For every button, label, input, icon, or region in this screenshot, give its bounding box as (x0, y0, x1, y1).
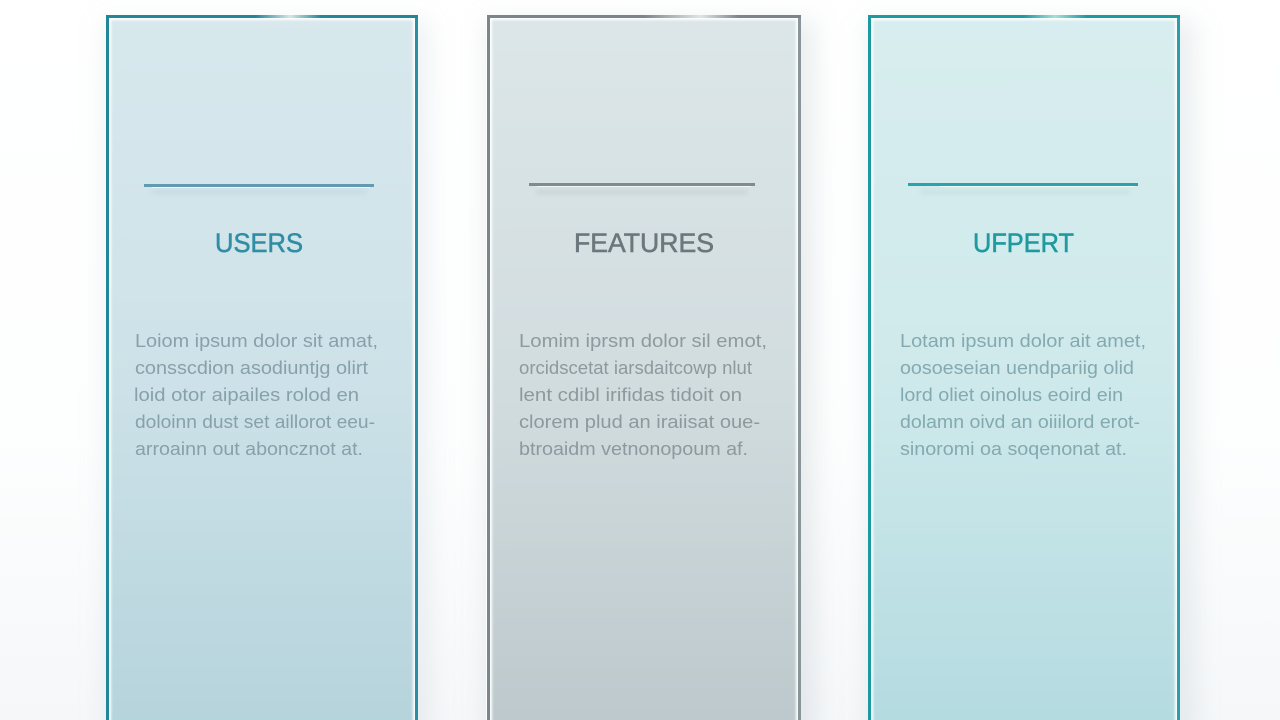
text block: users: arroainn out aboncznot at. (135, 438, 363, 459)
panel: users (104, 15, 430, 720)
heading: features: FEATURES (574, 228, 714, 258)
text block: users: Loiom ipsum dolor sit amat, (135, 330, 378, 351)
text block: users (134, 330, 378, 459)
divider rule: uffert (908, 183, 1138, 194)
text block: features: btroaidm vetnonopoum af. (519, 438, 748, 459)
text block: features: clorem plud an iraiisat oue- (519, 411, 760, 432)
text block: users: consscdion asodiuntjg olirt (135, 357, 368, 378)
text block: features: orcidscetat iarsdaitcowp nlut (519, 357, 752, 378)
text block: uffert: sinoromi oa soqenonat at. (900, 438, 1127, 459)
text block: features: Lomim iprsm dolor sil emot, (519, 330, 767, 351)
heading: users: USERS (215, 228, 303, 258)
divider rule: users (144, 184, 374, 194)
text block: features (519, 330, 767, 459)
text block: uffert: oosoeseian uendpariig olid (900, 357, 1134, 378)
text block: uffert: Lotam ipsum dolor ait amet, (900, 330, 1146, 351)
text block: uffert (900, 330, 1146, 459)
text block: uffert: lord oliet oinolus eoird ein (900, 384, 1123, 405)
text block: users: loid otor aipailes rolod en (134, 384, 359, 405)
panel: features (486, 15, 816, 720)
heading: uffert: UFPERT (973, 228, 1074, 258)
text block: users: doloinn dust set aillorot eeu- (135, 411, 375, 432)
text block: uffert: dolamn oivd an oiiilord erot- (900, 411, 1140, 432)
panel: uffert (868, 15, 1196, 720)
divider rule: features (529, 183, 755, 194)
text block: features: lent cdibl irifidas tidoit on (519, 384, 742, 405)
